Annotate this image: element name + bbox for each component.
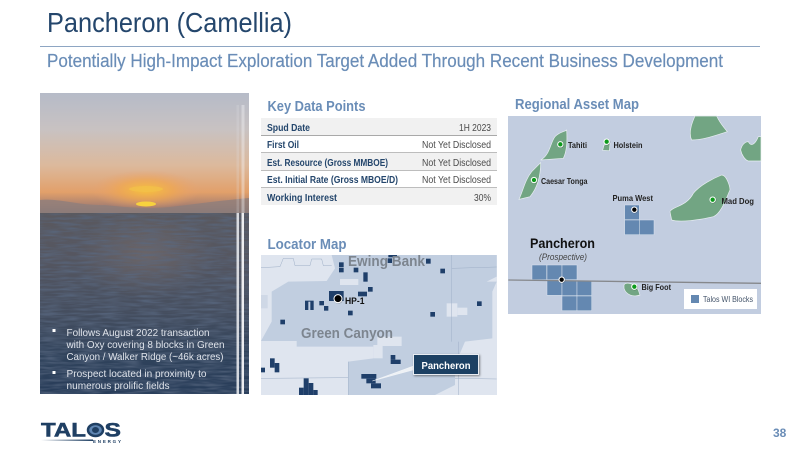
lease blocks bbox=[261, 255, 482, 395]
field labels: Tahiti bbox=[568, 140, 587, 150]
table: key data points: Working Interest bbox=[267, 193, 338, 204]
subtitle: Potentially High-Impact Exploration Target Added Through Recent Business Development bbox=[47, 51, 723, 71]
fields bbox=[519, 116, 761, 296]
field labels: Mad Dog bbox=[722, 196, 754, 206]
logo: Talos Energy bbox=[41, 420, 121, 444]
table: key data points: Not Yet Disclosed bbox=[422, 175, 491, 186]
callout pointer bbox=[372, 366, 414, 381]
map: regional assets bbox=[508, 116, 761, 314]
HP-1 marker bbox=[334, 295, 342, 303]
bullet: Oxy transaction: with Oxy covering 8 blocks in Green bbox=[66, 340, 224, 351]
label: Ewing Bank: Ewing Bank bbox=[348, 254, 426, 270]
wells bbox=[531, 139, 715, 289]
callout: Pancheron: Pancheron bbox=[422, 361, 470, 372]
label: Pancheron prospective: Pancheron bbox=[530, 235, 595, 251]
photo: sky and sea bbox=[40, 93, 249, 394]
logo: Talos Energy: TAL bbox=[41, 420, 86, 442]
table: key data points: 30% bbox=[474, 193, 491, 204]
label: Pancheron prospective bbox=[530, 235, 595, 263]
bullet: Oxy transaction bbox=[52, 328, 224, 363]
logo: Talos Energy: S bbox=[104, 420, 121, 442]
table: key data points: Est. Initial Rate (Gross MBOE/D) bbox=[267, 175, 398, 186]
table: key data points: First Oil bbox=[267, 140, 299, 151]
field labels: Puma West bbox=[612, 193, 653, 203]
label: Green Canyon: Green Canyon bbox=[301, 326, 393, 342]
table: key data points: 1H 2023 bbox=[459, 123, 491, 134]
heading: regional asset map: Regional Asset Map bbox=[515, 97, 639, 113]
bullet: proximity to fields: Prospect located in proximity to bbox=[66, 369, 207, 380]
legend: Talos WI Blocks bbox=[703, 295, 753, 304]
heading: locator map: Locator Map bbox=[268, 237, 347, 253]
label: Pancheron prospective: (Prospective) bbox=[539, 252, 587, 263]
protraction areas bbox=[261, 255, 497, 395]
panel: sunset photo with bullet list bbox=[40, 93, 249, 394]
callout: Pancheron bbox=[414, 354, 478, 374]
table: key data points: Est. Resource (Gross MMBOE) bbox=[267, 158, 388, 169]
table: key data points: Not Yet Disclosed bbox=[422, 140, 491, 151]
table: key data points: Not Yet Disclosed bbox=[422, 158, 491, 169]
label: HP-1: HP-1 bbox=[345, 296, 365, 307]
map: locator bbox=[261, 254, 497, 395]
heading: key data points: Key Data Points bbox=[268, 99, 366, 115]
title: Pancheron (Camellia) bbox=[47, 7, 292, 38]
field labels bbox=[541, 140, 754, 292]
field labels: Holstein bbox=[614, 140, 642, 150]
field labels: Big Foot bbox=[642, 282, 671, 292]
table: key data points bbox=[261, 118, 497, 205]
legend bbox=[684, 289, 757, 309]
table: key data points: Spud Date bbox=[267, 123, 310, 134]
bullet: Oxy transaction: Canyon / Walker Ridge (~46k acres) bbox=[66, 352, 224, 363]
page number: 38 bbox=[773, 426, 787, 440]
boundary line bbox=[508, 280, 761, 283]
bullet: proximity to fields bbox=[52, 369, 207, 392]
bullet: proximity to fields: numerous prolific fields bbox=[66, 381, 170, 392]
bullet: Oxy transaction: Follows August 2022 transaction bbox=[66, 328, 210, 339]
logo: Talos Energy: ENERGY bbox=[93, 439, 121, 444]
bullet list bbox=[52, 328, 224, 392]
field labels: Caesar Tonga bbox=[541, 176, 588, 186]
Talos WI blocks bbox=[532, 205, 654, 311]
